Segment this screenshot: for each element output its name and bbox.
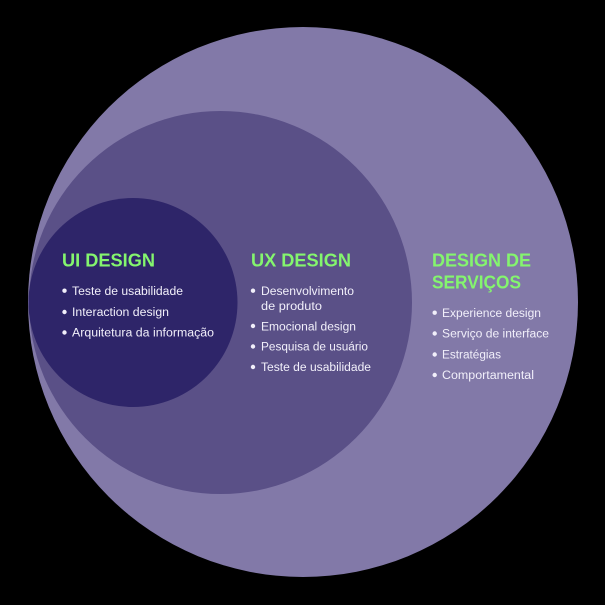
heading: ux design: UX DESIGN <box>251 250 351 270</box>
list: design de serviços items <box>432 308 549 382</box>
heading: design de serviços: DESIGN DE <box>432 250 531 270</box>
list: design de serviços items: Comportamental <box>442 370 534 382</box>
list: ux design items: Desenvolvimento <box>261 286 354 298</box>
list: ui design items: Teste de usabilidade <box>72 286 183 298</box>
list: ux design items: de produto <box>261 301 322 313</box>
list: design de serviços items: Serviço de interface <box>442 328 549 340</box>
list: design de serviços items: Experience design <box>442 308 541 320</box>
list: ui design items: Arquitetura da informação <box>72 328 214 340</box>
list: design de serviços items: Estratégias <box>442 350 501 362</box>
panel: ux design circle <box>29 111 412 494</box>
list: ui design items <box>62 286 214 340</box>
list: ui design items: Interaction design <box>72 307 169 319</box>
list: ux design items: Teste de usabilidade <box>261 362 371 374</box>
list: ux design items <box>251 286 371 374</box>
heading: design de serviços <box>432 250 531 292</box>
panel: ui design circle <box>28 198 238 407</box>
list: ux design items: Emocional design <box>261 322 356 334</box>
heading: ui design: UI DESIGN <box>62 250 155 270</box>
list: ux design items: Pesquisa de usuário <box>261 342 368 354</box>
heading: design de serviços: SERVIÇOS <box>432 272 521 292</box>
